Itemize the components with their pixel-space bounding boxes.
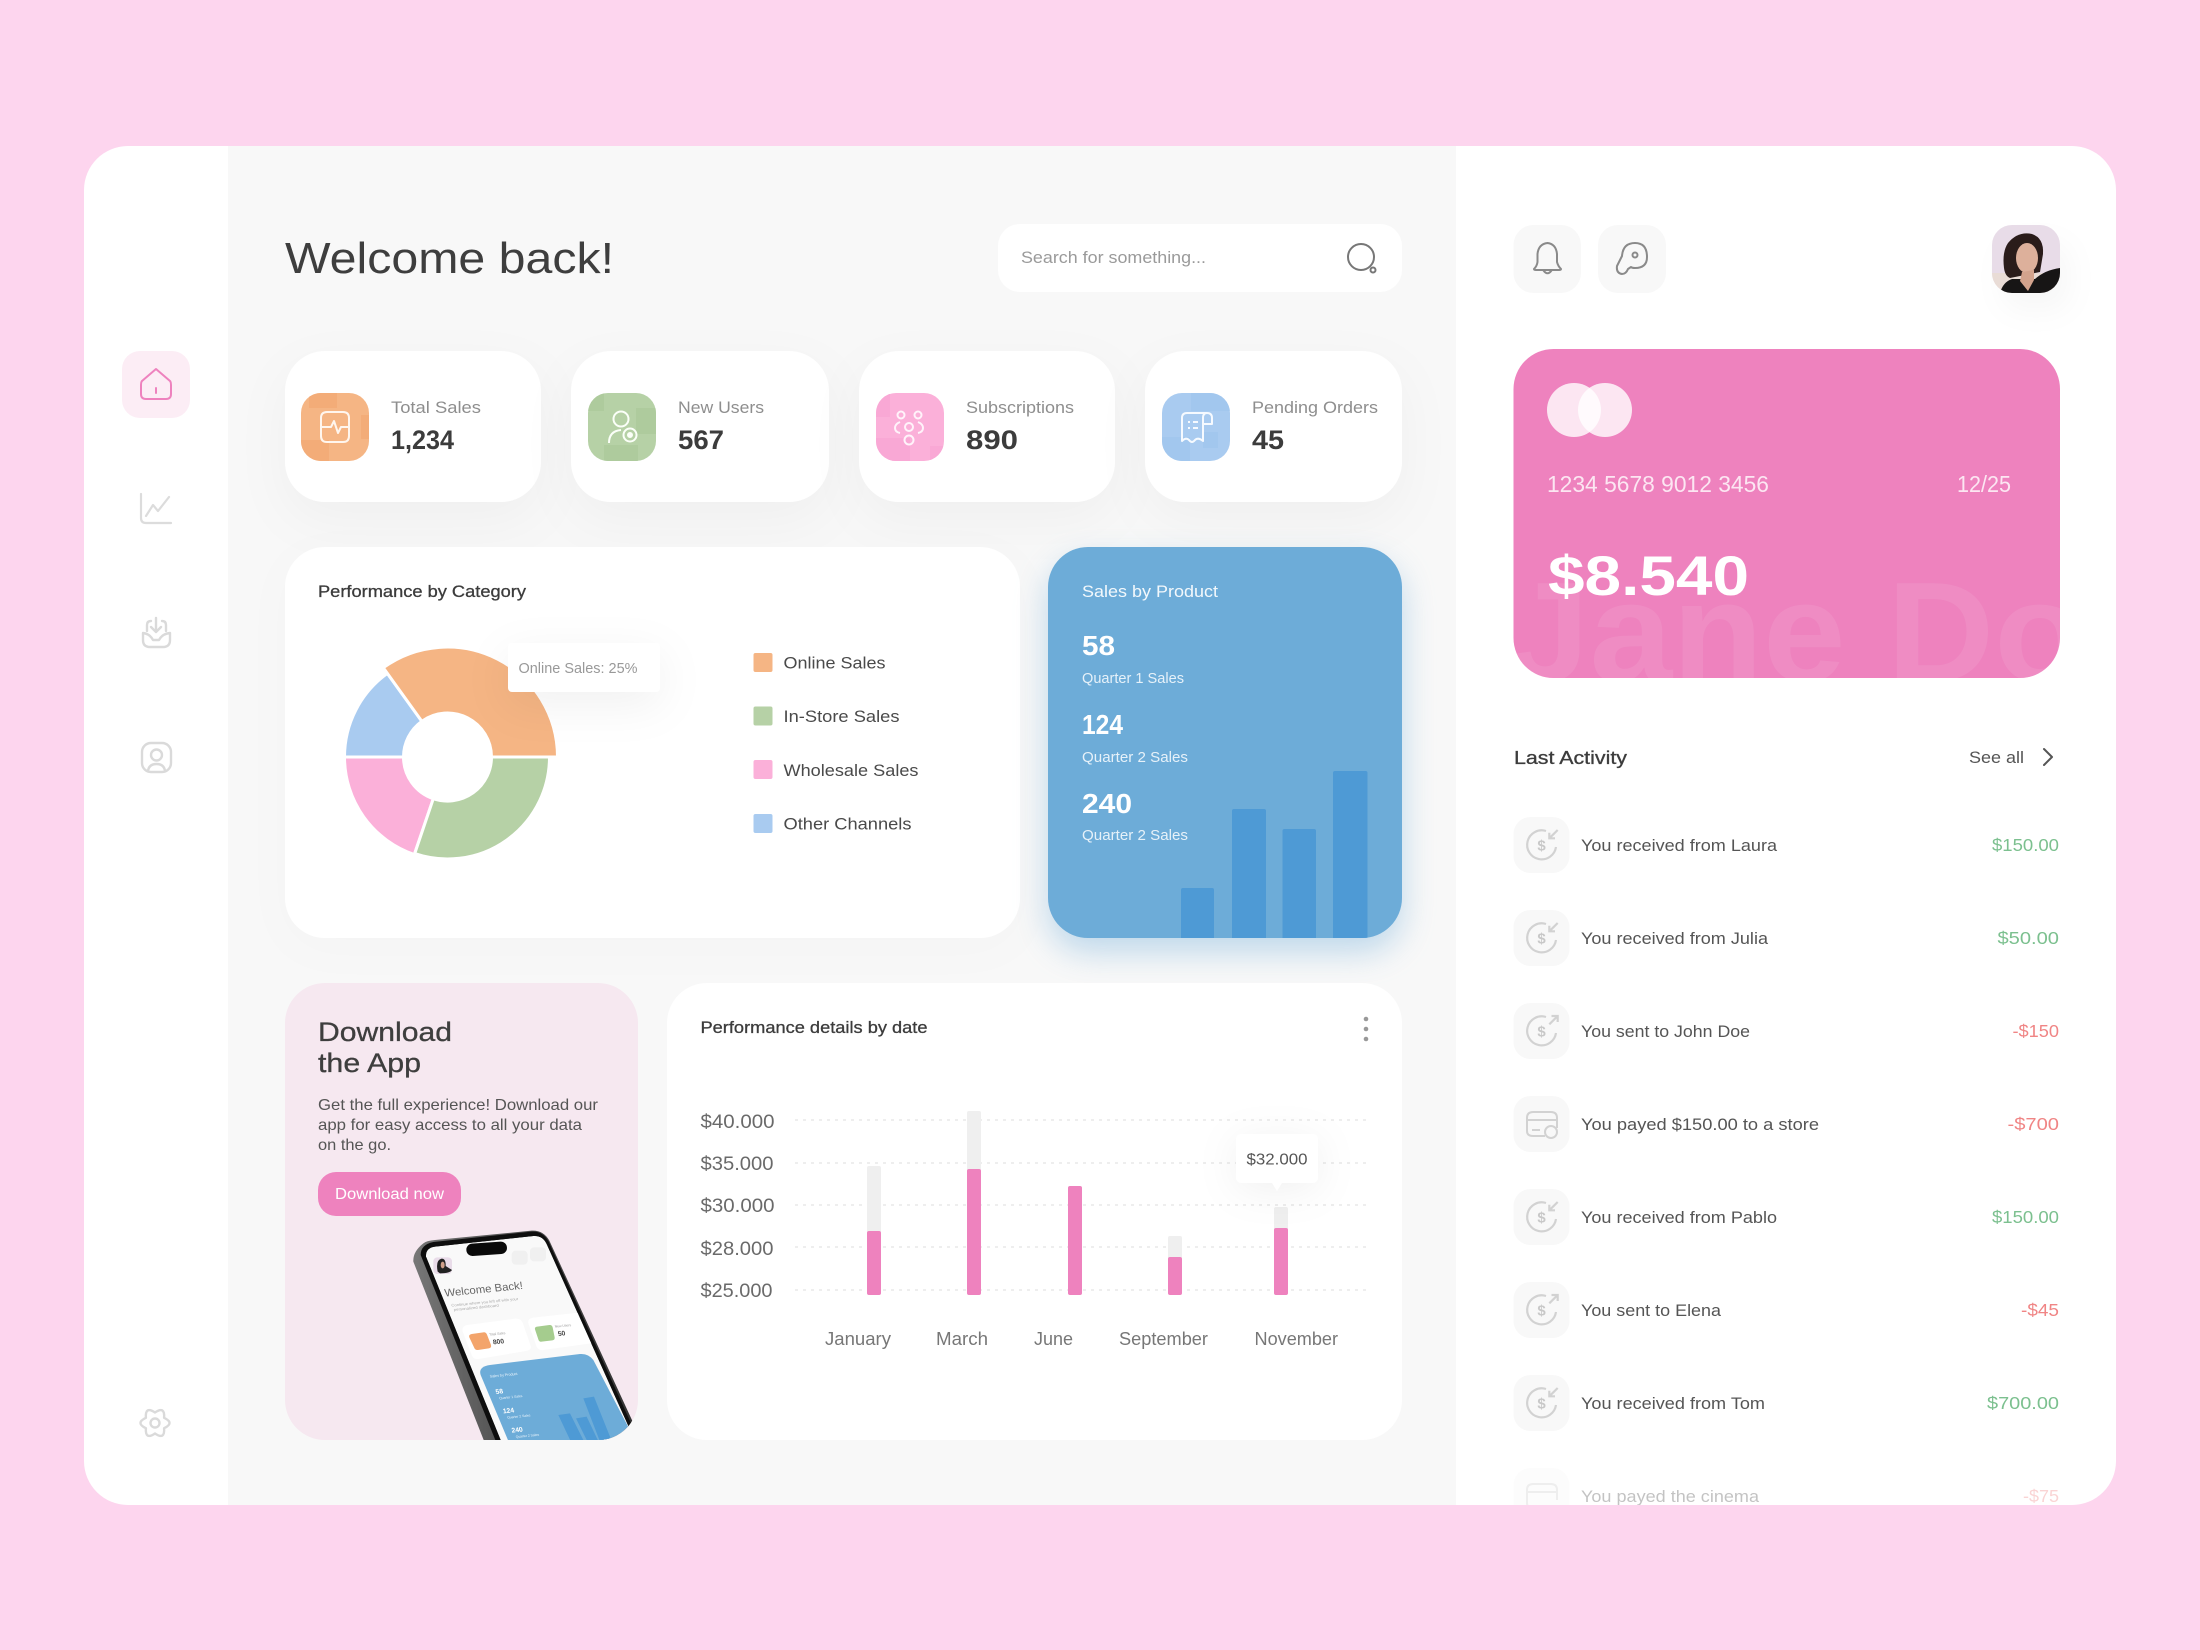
avatar	[1992, 225, 2060, 293]
panel heading: Sales by Product	[1082, 582, 1218, 601]
window surface	[84, 146, 2116, 1505]
active nav button: home	[122, 351, 190, 418]
icon: chart	[141, 494, 171, 523]
phone stat card two: New Users	[554, 1323, 572, 1329]
mini bar chart	[1181, 771, 1368, 949]
phone blue panel: 240	[511, 1427, 524, 1435]
phone mockup	[413, 1231, 635, 1443]
icon: sent money: $	[1537, 1024, 1546, 1040]
card balance: $8.540	[1548, 544, 1749, 607]
body copy: app for easy access to all your data	[318, 1117, 582, 1134]
stat card: subscriptions	[876, 393, 1074, 461]
activity row: store	[1514, 1096, 2059, 1152]
quarter 2 metric, second	[1082, 794, 1188, 842]
icon: chevron	[2044, 749, 2052, 765]
right column header	[1514, 225, 2060, 293]
x axis labels: November	[1254, 1329, 1338, 1349]
icon: received money	[1514, 1189, 1570, 1245]
legend: Wholesale Sales	[784, 761, 918, 780]
body copy	[318, 1097, 599, 1154]
icon: received money: $	[1537, 1210, 1546, 1226]
dashboard window	[84, 146, 2116, 1524]
x axis labels	[825, 1329, 1338, 1349]
stat card: subscriptions: Subscriptions	[966, 398, 1074, 417]
activity row: store: You payed $150.00 to a store	[1581, 1115, 1819, 1134]
x axis labels: September	[1119, 1329, 1208, 1349]
activity row: elena: You sent to Elena	[1581, 1301, 1722, 1320]
stat card: total sales: 1,234	[391, 425, 454, 455]
button: notifications	[1514, 225, 1581, 293]
icon: received money	[1514, 817, 1570, 873]
stat card: new users: New Users	[678, 398, 764, 417]
last activity header	[1514, 748, 2052, 768]
quarter 2 metric	[1082, 714, 1188, 764]
panel heading: Performance details by date	[700, 1018, 928, 1037]
phone blue panel: 124	[502, 1407, 515, 1415]
card logo	[1547, 383, 1632, 437]
phone stat card one: Total Sales	[489, 1331, 506, 1337]
phone header buttons	[512, 1247, 546, 1265]
stat card: new users	[588, 393, 764, 461]
icon: search	[1348, 244, 1376, 272]
tooltip: online sales: Online Sales: 25%	[518, 660, 638, 677]
icon: received money	[1514, 1375, 1570, 1431]
x axis labels: January	[825, 1329, 891, 1349]
icon: sent money: $	[1537, 1302, 1546, 1320]
quarter 2 metric, second: 240	[1082, 788, 1132, 819]
phone stat card one: 800	[492, 1338, 505, 1346]
panel: performance details by date	[667, 983, 1402, 1440]
icon: download box	[143, 618, 170, 647]
phone stat card one	[462, 1319, 531, 1359]
panel heading: Performance by Category	[318, 582, 527, 601]
icon: user add	[588, 393, 656, 461]
activity list	[1514, 817, 2059, 1524]
y axis labels: $25.000	[700, 1281, 772, 1302]
legend: Online Sales	[784, 654, 886, 672]
stat card: subscriptions: 890	[966, 425, 1018, 455]
phone blue panel: Sales by Product	[489, 1372, 518, 1379]
icon: user	[142, 743, 171, 772]
phone avatar	[433, 1257, 452, 1274]
activity row: store: -$700	[2008, 1114, 2059, 1134]
activity row: cinema, faded: -$75	[2023, 1486, 2059, 1506]
tooltip: november value: $32.000	[1246, 1152, 1308, 1168]
quarter 2 metric, second: Quarter 2 Sales	[1082, 828, 1188, 844]
activity row: john doe: You sent to John Doe	[1581, 1022, 1750, 1041]
heading: welcome back: Welcome back!	[285, 234, 614, 283]
phone blue panel: Quarter 2 Sales	[507, 1413, 531, 1420]
tooltip: november value	[1236, 1134, 1318, 1191]
search box: Search for something...	[1021, 248, 1206, 267]
icon: received money	[1514, 910, 1570, 966]
activity row: julia: $50.00	[1998, 928, 2059, 948]
activity row: elena: -$45	[2021, 1300, 2059, 1320]
legend	[754, 653, 918, 834]
icon: receipt	[1162, 393, 1230, 461]
phone body	[413, 1231, 635, 1443]
phone blue panel: Quarter 1 Sales	[499, 1394, 523, 1400]
card number: 1234 5678 9012 3456	[1547, 471, 1769, 497]
icon: card payment	[1514, 1468, 1570, 1524]
bar: january	[867, 1166, 881, 1295]
quarter 2 metric: Quarter 2 Sales	[1082, 750, 1188, 766]
x axis labels: March	[936, 1329, 988, 1349]
icon: sent money	[1514, 1282, 1570, 1338]
body copy: Get the full experience! Download our	[318, 1097, 599, 1114]
icon: received money: $	[1537, 838, 1546, 854]
body copy: on the go.	[318, 1137, 391, 1154]
activity row: tom: You received from Tom	[1581, 1394, 1765, 1413]
panel: performance by category	[319, 584, 918, 858]
stat card: total sales: Total Sales	[391, 398, 481, 417]
activity row: tom	[1514, 1375, 2059, 1431]
search box	[1022, 243, 1376, 274]
sidebar navigation	[122, 351, 190, 1436]
button: download now	[318, 1172, 461, 1216]
icon: card payment	[1514, 1096, 1570, 1152]
quarter 2 metric: 124	[1082, 709, 1123, 740]
activity row: cinema, faded	[1514, 1468, 2059, 1524]
y axis labels: $40.000	[700, 1112, 774, 1133]
donut chart	[344, 647, 558, 859]
bar: june	[1068, 1186, 1082, 1295]
last activity header: Last Activity	[1514, 748, 1627, 768]
icon: sent money	[1514, 1003, 1570, 1059]
legend: Other Channels	[784, 814, 912, 834]
activity row: julia: You received from Julia	[1581, 929, 1769, 948]
stat card: pending orders: 45	[1252, 425, 1284, 455]
activity row: laura: You received from Laura	[1581, 836, 1778, 855]
icon: received money: $	[1537, 1396, 1546, 1412]
quarter 1 metric: Quarter 1 Sales	[1082, 671, 1184, 687]
bar: september	[1168, 1236, 1182, 1295]
button: key	[1598, 225, 1666, 293]
watermark name: Jane Do	[1507, 553, 2085, 712]
panel heading: the App	[318, 1048, 421, 1078]
icon: pulse	[301, 393, 369, 461]
phone notch	[466, 1241, 507, 1256]
button: download now: Download now	[335, 1186, 445, 1203]
stat card: pending orders: Pending Orders	[1252, 398, 1378, 417]
activity row: pablo	[1514, 1189, 2059, 1245]
y axis labels: $35.000	[700, 1154, 774, 1175]
phone blue panel: 58	[495, 1388, 504, 1396]
last activity header: See all	[1969, 748, 2024, 767]
panel: sales by product	[1048, 547, 1402, 949]
quarter 1 metric: 58	[1082, 630, 1115, 661]
legend: In-Store Sales	[784, 707, 900, 726]
activity row: laura: $150.00	[1992, 835, 2059, 855]
bar: march	[967, 1111, 981, 1295]
icon: network	[876, 393, 944, 461]
tooltip: online sales	[508, 662, 638, 700]
icon: received money: $	[1537, 930, 1546, 948]
activity row: elena	[1514, 1282, 2059, 1338]
phone bezel	[421, 1232, 633, 1443]
icon: more menu	[1364, 1017, 1368, 1041]
activity row: cinema, faded: You payed the cinema	[1581, 1487, 1760, 1506]
main content background	[228, 146, 1456, 1505]
activity row: tom: $700.00	[1987, 1393, 2059, 1413]
phone stat card two: 50	[557, 1330, 566, 1338]
activity row: john doe: -$150	[2012, 1021, 2059, 1041]
bar chart	[867, 1111, 1288, 1295]
panel heading	[318, 1017, 452, 1078]
phone blue panel: Quarter 2 Sales	[515, 1433, 540, 1439]
phone welcome text: Welcome Back!	[444, 1280, 524, 1300]
phone screen	[426, 1236, 633, 1443]
icon: settings	[140, 1410, 170, 1436]
y axis labels	[700, 1112, 774, 1302]
panel: download the app	[285, 983, 638, 1443]
quarter 1 metric	[1082, 636, 1184, 686]
x axis labels: June	[1034, 1329, 1073, 1349]
phone sub text	[451, 1297, 519, 1312]
phone blue panel	[480, 1354, 633, 1443]
phone sub text: Continue where you left off with your	[451, 1297, 519, 1308]
card expiry: 12/25	[1957, 471, 2011, 497]
activity row: laura	[1514, 817, 2059, 873]
stat card: total sales	[301, 393, 480, 461]
y axis labels: $28.000	[700, 1239, 774, 1260]
activity row: pablo: You received from Pablo	[1581, 1208, 1777, 1227]
phone sub text: personalized dashboard	[453, 1304, 499, 1312]
activity row: john doe	[1514, 1003, 2059, 1059]
panel heading: Download	[318, 1017, 452, 1047]
credit card	[1507, 349, 2085, 712]
bar: november	[1274, 1207, 1288, 1295]
y axis labels: $30.000	[700, 1196, 774, 1217]
activity row: pablo: $150.00	[1992, 1207, 2059, 1227]
stat card: pending orders	[1162, 393, 1378, 461]
stat card: new users: 567	[678, 425, 724, 455]
activity row: julia	[1514, 910, 2059, 966]
phone stat card two	[528, 1311, 603, 1350]
